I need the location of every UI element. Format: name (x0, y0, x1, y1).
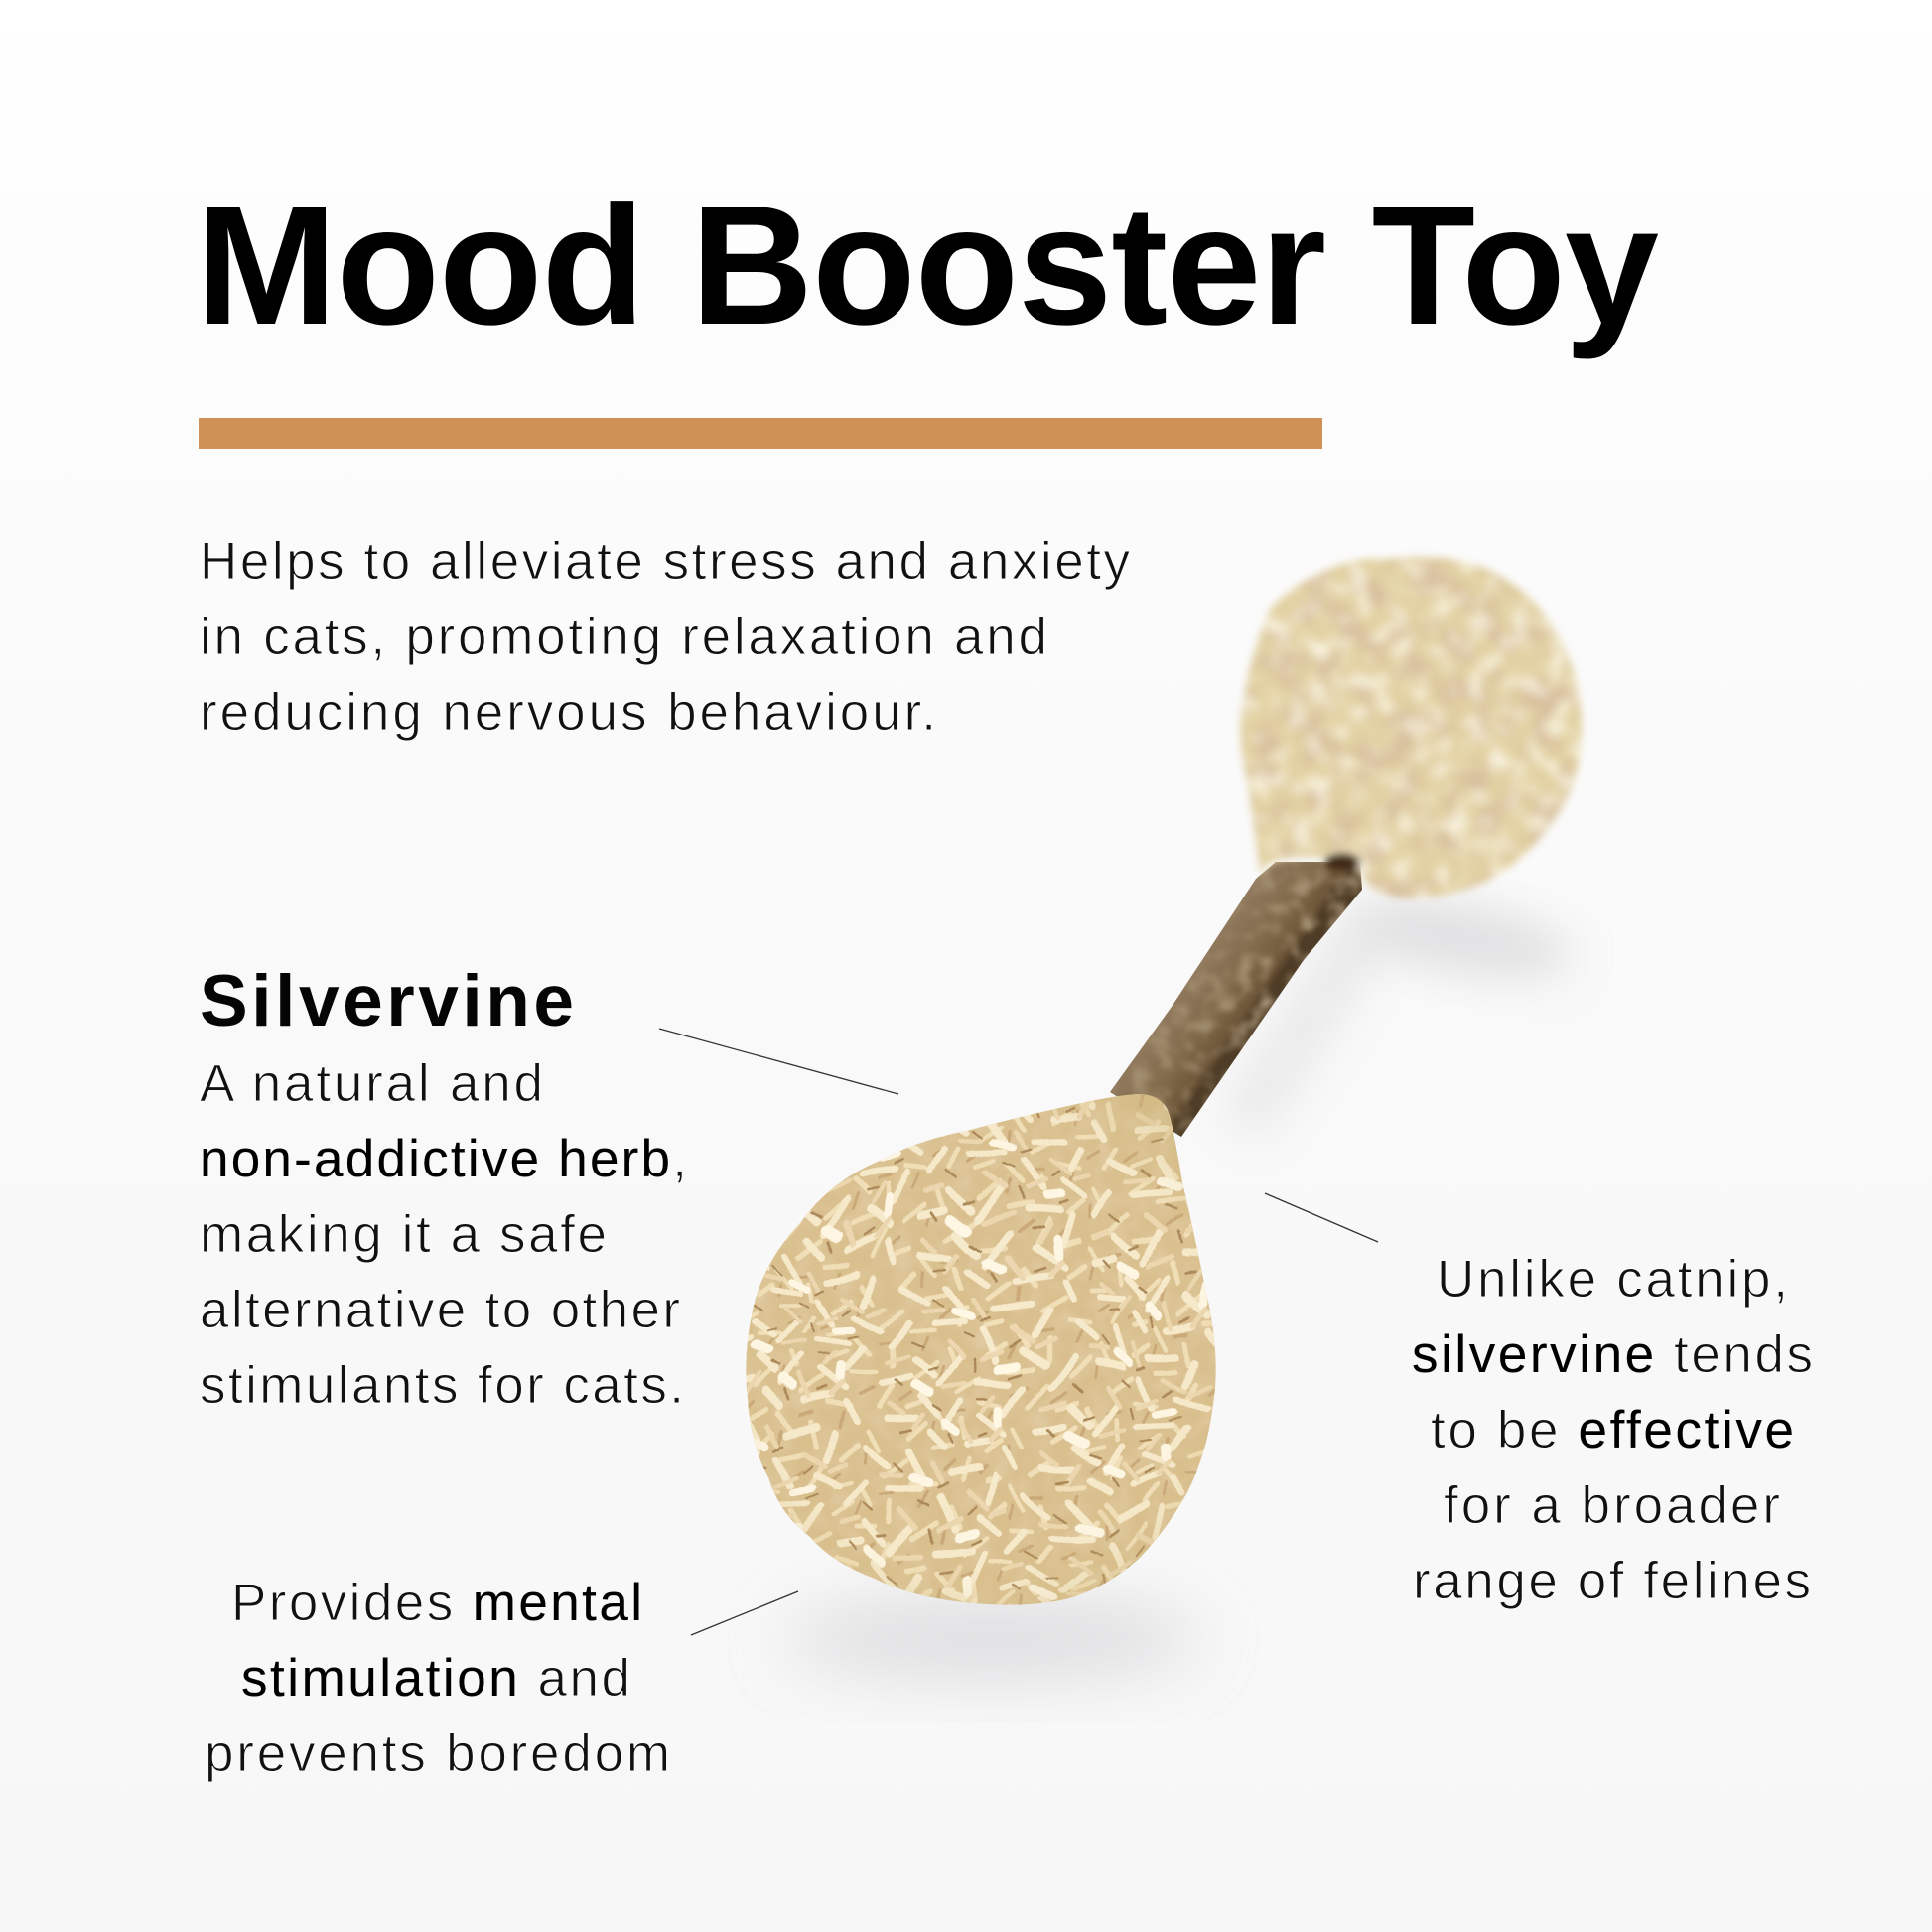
product photo: silvervine toy (695, 536, 1598, 1680)
intro paragraph (200, 532, 1130, 742)
accent bar (199, 418, 1322, 449)
intro paragraph: reducing nervous behaviour. (200, 683, 936, 742)
callout: silvervine (200, 961, 687, 1415)
intro paragraph: Helps to alleviate stress and anxiety (200, 532, 1130, 591)
toy shadows (784, 886, 1578, 1680)
callout: mental stimulation: prevents boredom (205, 1725, 670, 1783)
lower ball with fibre texture (746, 1094, 1216, 1605)
intro paragraph: in cats, promoting relaxation and (200, 608, 1047, 666)
callout: catnip comparison: range of felines (1413, 1552, 1811, 1610)
callout body: non-addictive herb, (200, 1130, 687, 1188)
stick (1110, 862, 1362, 1137)
callout: catnip comparison (1412, 1250, 1813, 1610)
callout body: making it a safe (200, 1205, 607, 1264)
callout: catnip comparison: silvervine tends (1412, 1325, 1813, 1384)
callout body: stimulants for cats. (200, 1356, 684, 1415)
callout body (200, 1054, 687, 1415)
upper ball, out of focus (1235, 552, 1587, 903)
leader line: silvervine (659, 1029, 898, 1094)
callout: catnip comparison: for a broader (1444, 1476, 1780, 1535)
callout body: A natural and (200, 1054, 543, 1113)
leader line: catnip comparison (1265, 1193, 1378, 1242)
title: Mood Booster Toy (196, 171, 1659, 360)
callout: mental stimulation: stimulation and (241, 1649, 630, 1708)
leader line: mental stimulation (691, 1591, 798, 1635)
callout body: alternative to other (200, 1281, 680, 1339)
callout heading: Silvervine (200, 961, 574, 1041)
callout: catnip comparison: to be effective (1431, 1401, 1794, 1459)
callout: mental stimulation: Provides mental (231, 1574, 642, 1632)
callout: catnip comparison: Unlike catnip, (1437, 1250, 1788, 1309)
callout: mental stimulation (205, 1574, 670, 1783)
